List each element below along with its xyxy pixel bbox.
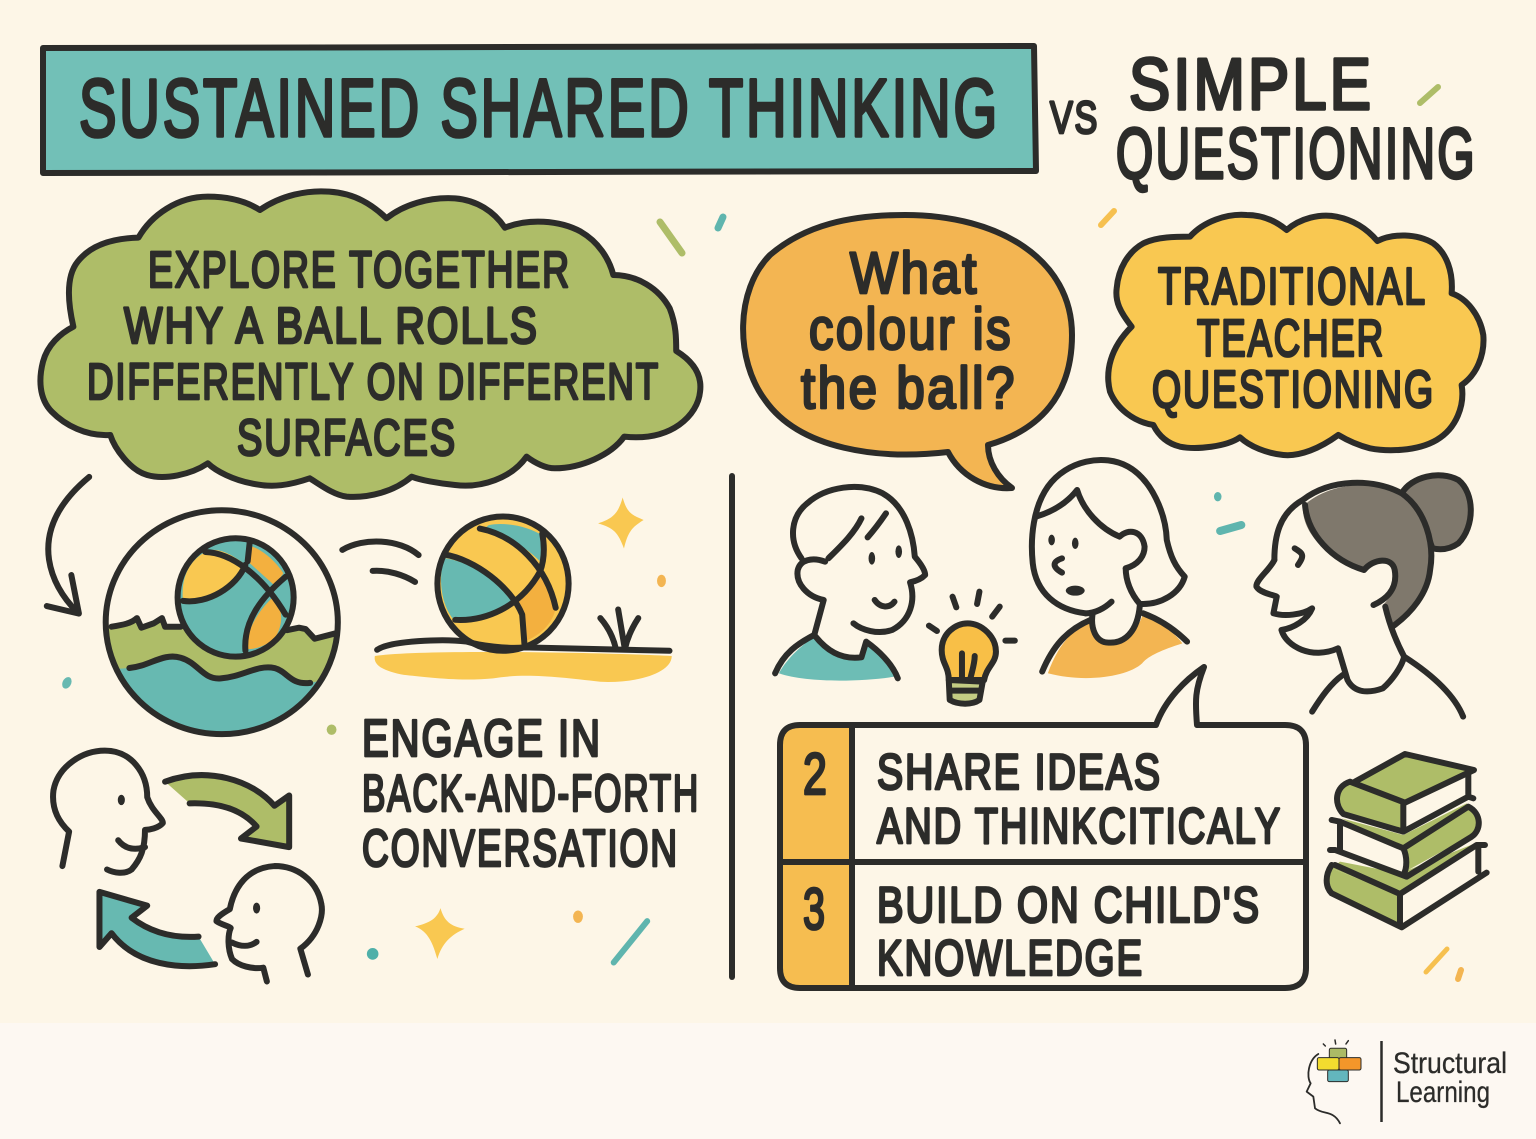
rolling ball on ground — [375, 516, 672, 682]
speech bubble: what colour is the ball: the ball? — [801, 356, 1017, 421]
row 3 — [803, 877, 1261, 986]
row 3: 3 — [803, 877, 827, 942]
row 3: BUILD ON CHILD'S — [877, 877, 1261, 933]
title banner — [43, 46, 1036, 173]
logo: structural learning — [1307, 1040, 1507, 1123]
left illustrations — [47, 477, 672, 981]
heading: simple questioning — [1116, 45, 1477, 194]
person right — [216, 866, 322, 981]
engage text: CONVERSATION — [362, 820, 679, 878]
vertical divider — [729, 476, 735, 977]
motion lines — [342, 541, 419, 582]
right illustrations — [775, 460, 1471, 717]
arrow: teal — [99, 892, 215, 966]
child boy — [775, 487, 925, 681]
green cloud text: SURFACES — [237, 409, 457, 466]
engage text: ENGAGE IN — [362, 710, 602, 768]
row 2 — [803, 742, 1282, 854]
teacher — [1256, 475, 1471, 717]
row 2: AND THINKCITICALY — [877, 798, 1282, 854]
green cloud text — [87, 241, 660, 466]
speech bubble: what colour is the ball — [743, 215, 1072, 488]
arrow: green — [165, 775, 289, 847]
green cloud text: WHY A BALL ROLLS — [124, 297, 539, 354]
yellow cloud text — [1152, 258, 1435, 419]
speech bubble: what colour is the ball: What — [850, 241, 979, 306]
green cloud text: DIFFERENTLY ON DIFFERENT — [87, 353, 660, 410]
engage text: BACK-AND-FORTH — [362, 765, 700, 823]
yellow cloud text: QUESTIONING — [1152, 361, 1435, 419]
yellow cloud: traditional teacher questioning — [1108, 215, 1484, 455]
person left — [53, 751, 163, 873]
logo icon — [1307, 1040, 1361, 1123]
decorative stars and dots — [61, 498, 666, 962]
heading: simple questioning: SIMPLE — [1129, 45, 1374, 125]
green cloud: explore together — [40, 191, 700, 497]
title banner: SUSTAINED SHARED THINKING — [79, 63, 1000, 154]
row 3: KNOWLEDGE — [877, 930, 1144, 986]
ball in circle — [178, 538, 294, 657]
row 2: 2 — [803, 742, 829, 807]
icon: stack of books — [1327, 754, 1487, 927]
magnified surface circle — [105, 510, 341, 739]
green cloud text: EXPLORE TOGETHER — [148, 241, 571, 298]
arrow: down to circle — [47, 477, 89, 614]
teal confetti — [1214, 492, 1241, 531]
table: share ideas and build knowledge — [780, 667, 1306, 988]
row 2: SHARE IDEAS — [877, 744, 1162, 800]
child girl — [1032, 460, 1187, 678]
speech bubble: what colour is the ball: colour is — [809, 297, 1013, 362]
vs label: VS — [1050, 92, 1099, 143]
logo: structural learning: Learning — [1396, 1076, 1490, 1109]
yellow cloud text: TRADITIONAL — [1158, 258, 1427, 316]
icon: light bulb — [929, 592, 1015, 704]
yellow cloud text: TEACHER — [1197, 310, 1385, 368]
engage text — [362, 710, 700, 878]
confetti accents — [660, 87, 1461, 979]
logo: structural learning: Structural — [1393, 1047, 1507, 1080]
